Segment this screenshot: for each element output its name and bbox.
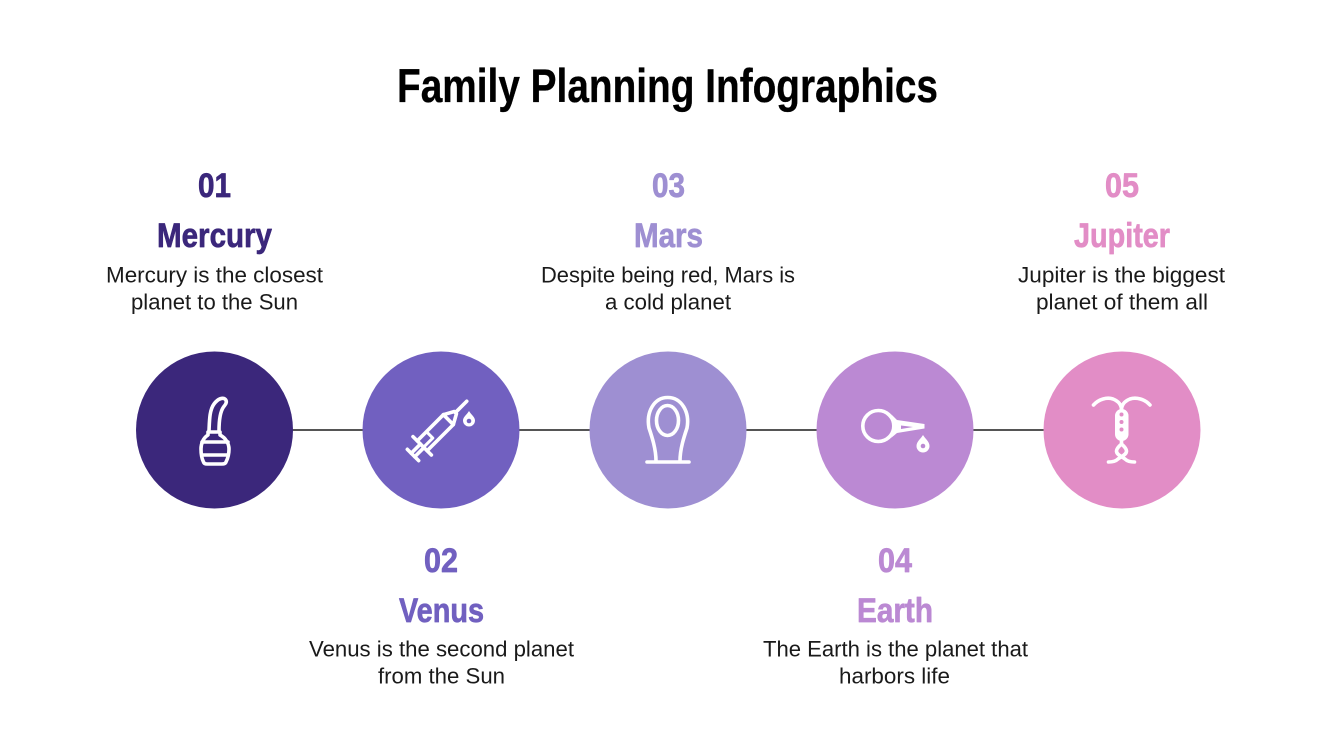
circle 05 bbox=[1044, 352, 1200, 508]
description: Venus: Venus is the second planet bbox=[309, 636, 575, 662]
number 01: 01 bbox=[198, 167, 231, 205]
step 04: Earth text bbox=[763, 542, 1029, 688]
description: Mercury: Mercury is the closest bbox=[106, 262, 324, 288]
description: Jupiter: planet of them all bbox=[1036, 290, 1208, 314]
icon: syringe bbox=[404, 392, 476, 464]
description: Earth: harbors life bbox=[839, 664, 950, 688]
drop bbox=[916, 435, 930, 452]
number 04: 04 bbox=[878, 542, 912, 580]
circle 04 bbox=[816, 352, 974, 508]
description: Mercury bbox=[106, 262, 324, 314]
circle 03 bbox=[590, 352, 746, 508]
description: Mercury: planet to the Sun bbox=[131, 290, 298, 314]
heading: Earth: Earth bbox=[857, 592, 933, 630]
heading: Mars: Mars bbox=[634, 217, 703, 255]
circle 01 bbox=[136, 352, 293, 508]
description: Jupiter: Jupiter is the biggest bbox=[1018, 262, 1226, 288]
arms bbox=[1094, 398, 1150, 410]
connector line bbox=[290, 429, 1046, 431]
capsule bbox=[1115, 409, 1128, 441]
icon: bulb syringe bbox=[201, 398, 229, 464]
step 05: Jupiter text bbox=[1018, 167, 1226, 314]
drop bbox=[463, 411, 475, 426]
number 02: 02 bbox=[424, 542, 458, 580]
description: Mars bbox=[541, 262, 795, 314]
number 03: 03 bbox=[652, 167, 685, 205]
title: Family Planning Infographics bbox=[397, 59, 938, 112]
heading: Jupiter: Jupiter bbox=[1074, 217, 1170, 255]
step 02: Venus text bbox=[309, 542, 575, 688]
circle 02 bbox=[362, 352, 520, 508]
icon: diaphragm bbox=[647, 398, 689, 462]
description: Venus: from the Sun bbox=[378, 664, 505, 688]
nozzle bbox=[891, 414, 924, 438]
description: Mars: a cold planet bbox=[605, 290, 732, 314]
description: Venus bbox=[309, 636, 575, 688]
number 05: 05 bbox=[1105, 167, 1139, 205]
step 03: Mars text bbox=[541, 167, 795, 314]
heading: Venus: Venus bbox=[399, 592, 484, 630]
heading: Mercury: Mercury bbox=[157, 217, 272, 255]
description: Earth: The Earth is the planet that bbox=[763, 636, 1029, 662]
bulb bbox=[863, 410, 894, 442]
lower strand bbox=[1108, 441, 1134, 462]
icon: dropper bbox=[863, 410, 930, 452]
icon: IUD bbox=[1094, 398, 1150, 462]
step 01: Mercury text bbox=[106, 167, 324, 314]
description: Jupiter bbox=[1018, 262, 1226, 314]
description: Mars: Despite being red, Mars is bbox=[541, 262, 795, 288]
description: Earth bbox=[763, 636, 1029, 688]
